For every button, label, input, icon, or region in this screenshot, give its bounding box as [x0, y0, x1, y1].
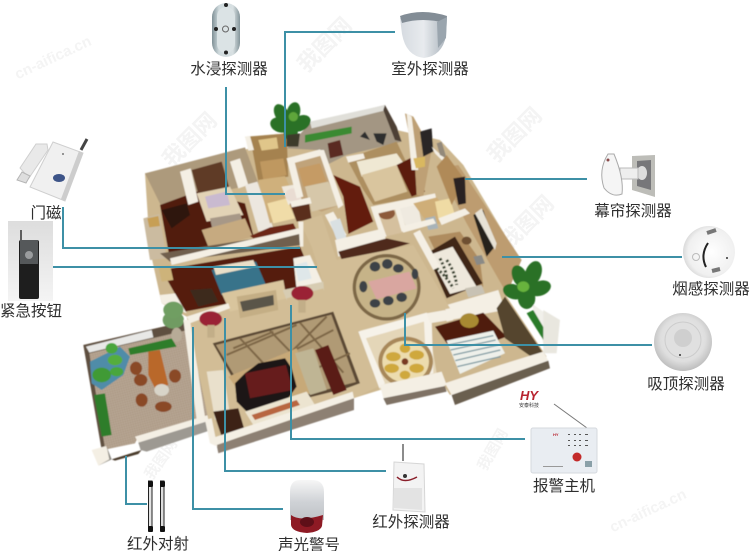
logo: brand mark: HY [520, 388, 539, 403]
logo: brand mark [519, 388, 539, 409]
front walls [427, 310, 450, 323]
living room rug [213, 312, 360, 412]
floor plan illustration [83, 101, 560, 466]
dining [353, 254, 421, 321]
kitchen counter [427, 237, 483, 298]
label: smoke detector: 烟感探测器 [672, 280, 750, 298]
right wing wood walls [438, 165, 522, 293]
master bedroom [145, 147, 258, 205]
top terrace [287, 105, 402, 165]
watermark: cn-aifica.cn [12, 33, 94, 83]
icon: door magnet sensor [17, 139, 87, 201]
watermark: 我图网 [474, 426, 512, 473]
icon: alarm host: HY [553, 432, 559, 437]
bathroom [245, 182, 273, 232]
baths right [372, 202, 413, 237]
icon: infrared beams [148, 481, 165, 532]
sofa set [228, 348, 313, 412]
left garden terrace [83, 311, 210, 466]
base floor [145, 130, 547, 443]
icon: panic button remote [8, 221, 53, 301]
icon: ceiling detector [654, 313, 712, 371]
connector lines [53, 32, 682, 509]
watermark: cn-aifica.cn [607, 486, 689, 536]
label: panic button: 紧急按钮 [0, 302, 62, 320]
icon: alarm host [531, 404, 597, 473]
walls extending right [543, 310, 560, 353]
label: water immersion detector: 水浸探测器 [190, 60, 268, 78]
label: ceiling detector: 吸顶探测器 [647, 375, 725, 393]
icon: water immersion detector [212, 3, 240, 57]
label: alarm host: 报警主机 [533, 477, 595, 495]
living room front wall [212, 392, 354, 445]
icon: smoke detector [683, 226, 735, 278]
watermark: 我图网 [483, 103, 547, 167]
closets top [250, 133, 288, 182]
icon: outdoor detector [400, 12, 447, 58]
bed 3 [162, 247, 317, 312]
icon: infrared detector [393, 444, 425, 512]
label: outdoor detector: 室外探测器 [391, 60, 469, 78]
living hall floor [188, 215, 450, 443]
kitchen wood and balcony [435, 313, 507, 353]
label: door magnet: 门磁 [30, 204, 62, 222]
palms [268, 101, 314, 141]
logo: brand mark: 安泰科技 [519, 402, 539, 409]
flowers [291, 286, 313, 301]
foyer medallion [360, 313, 437, 390]
watermark: 我图网 [495, 191, 559, 255]
bedroom 2 [347, 142, 423, 205]
label: curtain detector: 幕帘探测器 [594, 202, 672, 220]
icon: curtain detector [602, 154, 655, 197]
label: infrared detector: 红外探测器 [372, 513, 450, 531]
watermark: 我图网 [141, 436, 181, 483]
icon: sound and light siren [290, 480, 324, 533]
watermark: 我图网 [158, 108, 222, 172]
corridor wood floor [333, 175, 373, 234]
watermark: 我图网 [293, 13, 357, 77]
small rooms [288, 152, 340, 212]
